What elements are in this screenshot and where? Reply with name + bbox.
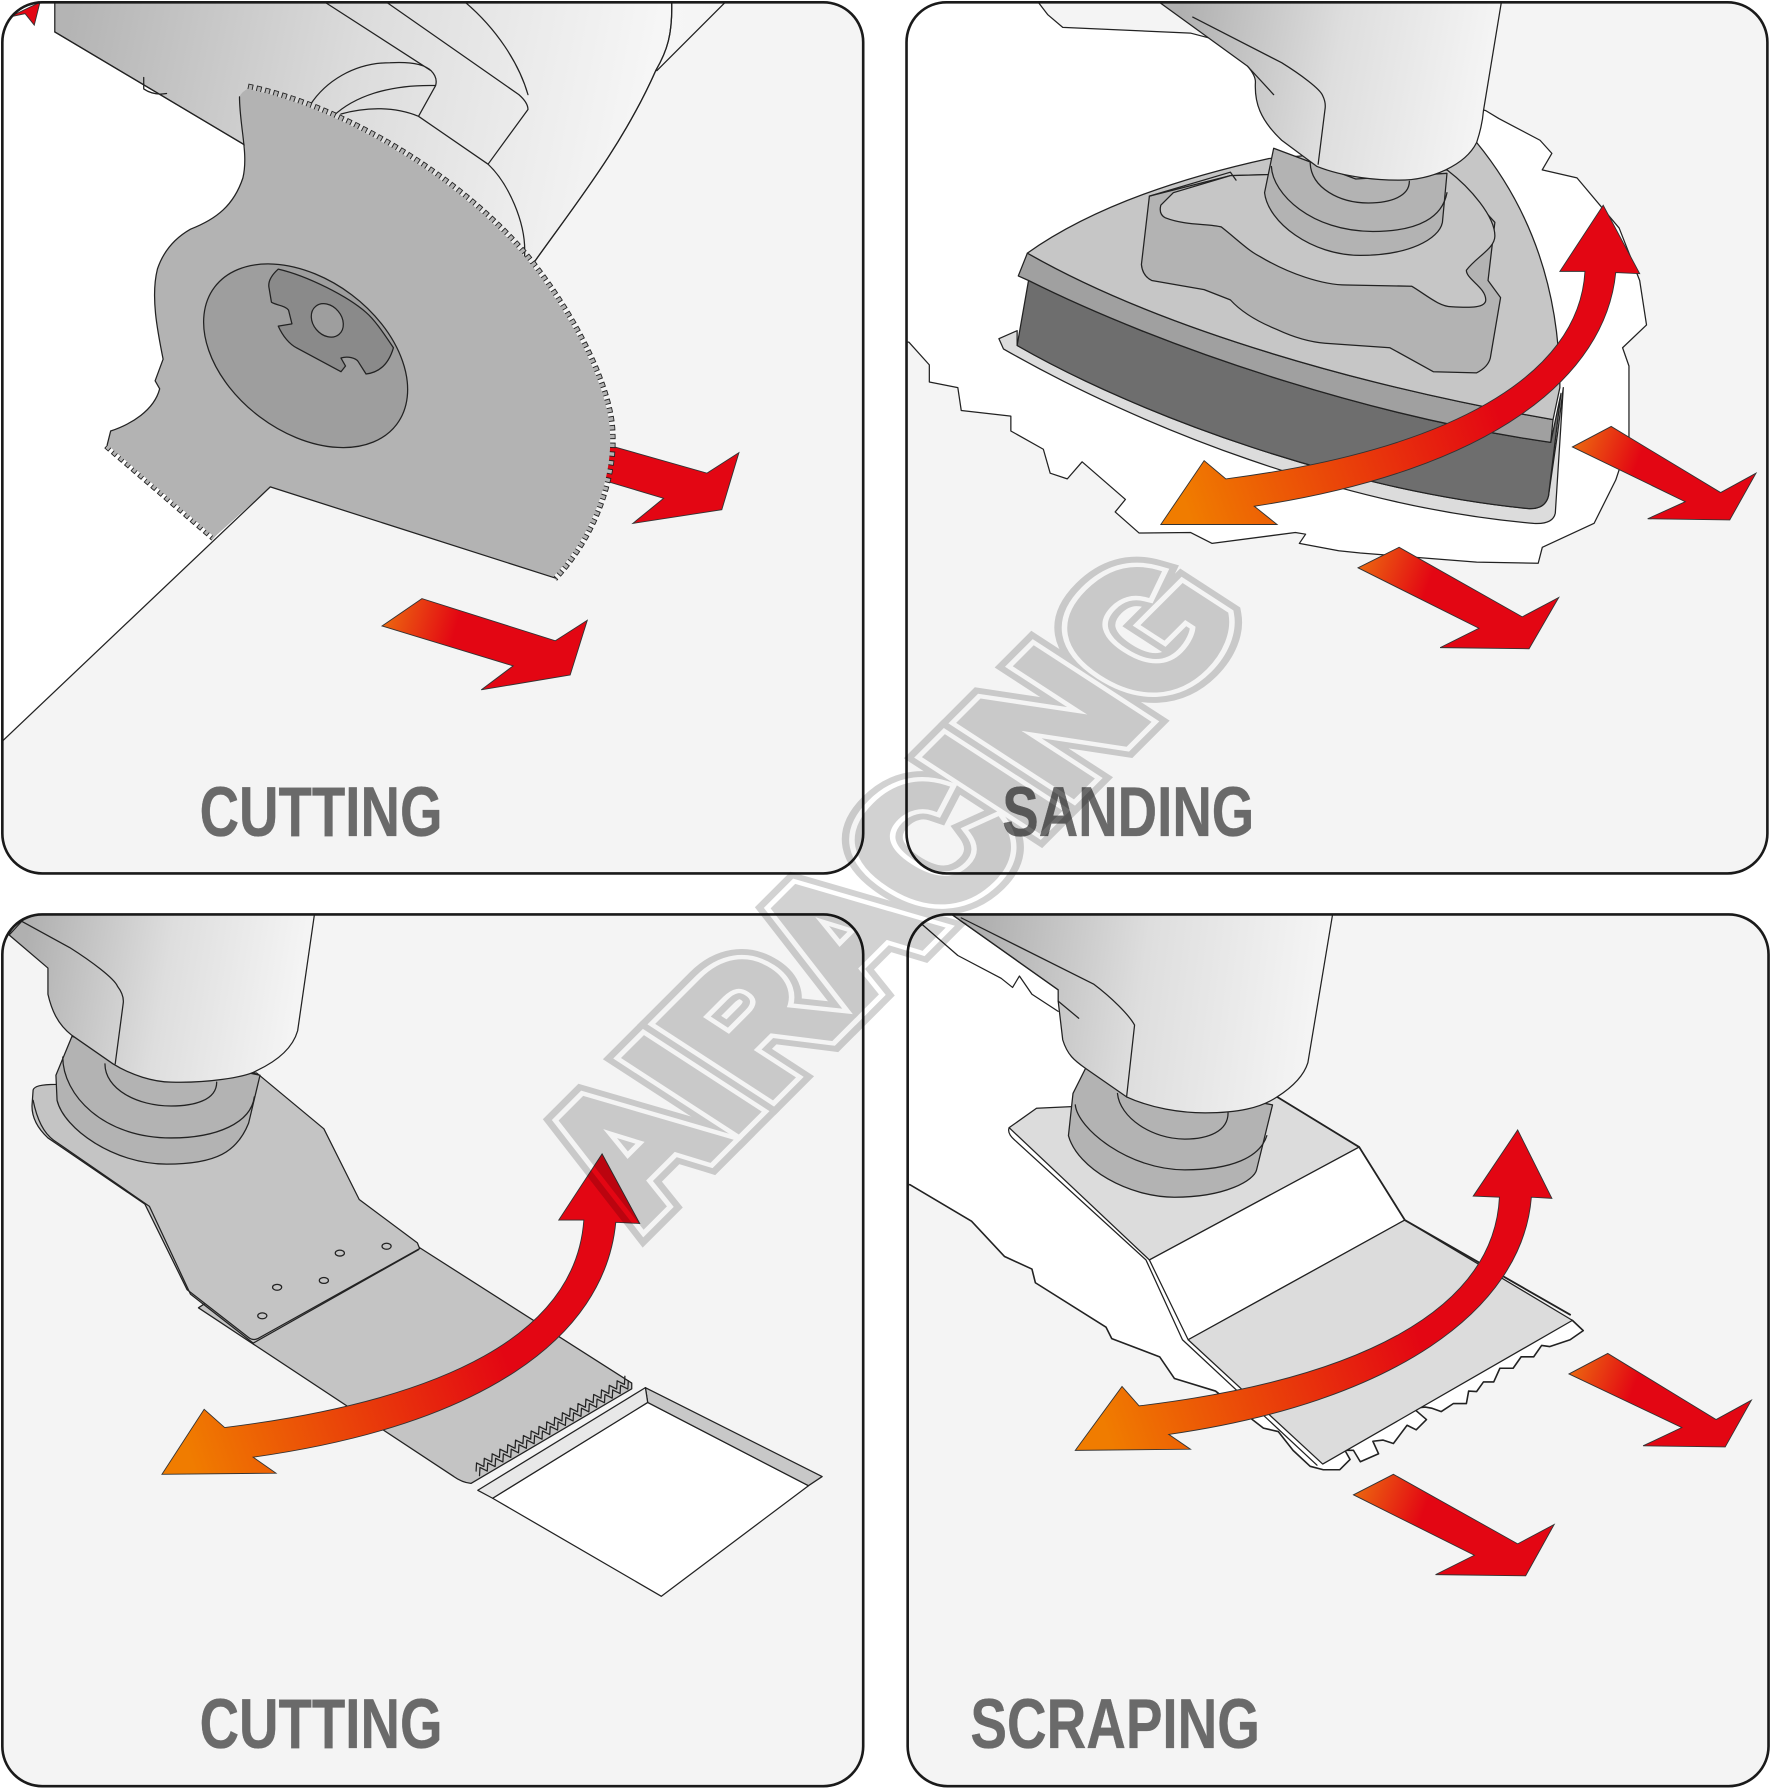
icon: triangular sanding pad [999, 143, 1563, 523]
icon: collar rings [1068, 1068, 1273, 1197]
label: scraping: SCRAPING [970, 1684, 1260, 1763]
label: cutting: CUTTING [200, 772, 442, 851]
panel: cutting with round blade [2, 0, 863, 876]
arrow: curved oscillation [1075, 1130, 1552, 1450]
panel: cutting with narrow blade [2, 912, 863, 1786]
icon: tool body [1156, 0, 1502, 180]
workpiece [4, 486, 556, 741]
arrow: curved oscillation [1161, 205, 1640, 524]
icon: narrow blade [32, 1073, 632, 1483]
icon: tool body [949, 912, 1333, 1113]
white cleaned area [901, 912, 1583, 1470]
sanded white area [901, 0, 1647, 563]
icon: scraper blade [1009, 1097, 1572, 1465]
icon: tool head [55, 0, 672, 265]
arrow: cutting direction [382, 599, 587, 690]
icon: cut-out square [478, 1388, 822, 1596]
icon: tool body [9, 912, 315, 1082]
arrow fragment top corner [13, 4, 40, 26]
arrow: blade feed direction [599, 442, 739, 523]
arrow: curved oscillation [162, 1154, 640, 1474]
arrow: right [1572, 426, 1756, 520]
watermark: AIRACING [543, 556, 1242, 1248]
icon: round saw blade [107, 89, 610, 577]
icon: collar rings [56, 1036, 260, 1164]
arrow: lower [1353, 1474, 1554, 1576]
panel: scraping [901, 912, 1769, 1786]
arrow: lower [1358, 547, 1559, 649]
label: sanding: SANDING [1002, 772, 1254, 851]
panel: sanding [901, 0, 1767, 873]
label: cutting: CUTTING [200, 1684, 442, 1763]
arrow: right [1569, 1353, 1751, 1447]
